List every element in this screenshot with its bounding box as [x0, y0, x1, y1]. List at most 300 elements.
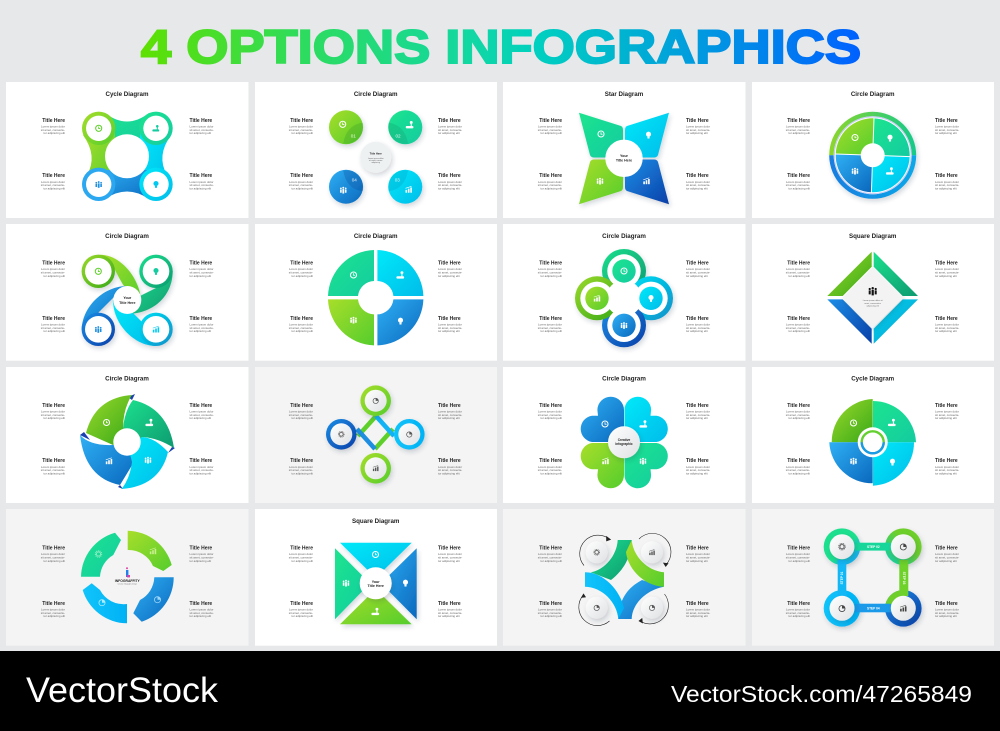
text block: bottom right: sit amet, consecte-: [935, 326, 959, 330]
bar: step 03: STEP 03: [902, 572, 906, 585]
center label: [119, 296, 135, 305]
text block: top left: [786, 403, 810, 420]
text block: top right: [686, 118, 710, 135]
center hole: [113, 428, 141, 456]
petal: bottom left: [581, 443, 624, 488]
text block: top right: [438, 118, 462, 135]
text block: top right: tur adipiscing elit: [190, 274, 211, 278]
text block: bottom left: [786, 458, 810, 475]
text block: top left: tur adipiscing elit: [788, 559, 810, 563]
text block: bottom left: Lorem ipsum dolor: [41, 607, 65, 611]
text block: bottom right: Lorem ipsum dolor: [438, 322, 462, 326]
text block: top right: Title Here: [438, 260, 461, 266]
text block: bottom right: tur adipiscing elit: [438, 329, 460, 333]
text block: bottom right: Lorem ipsum dolor: [686, 180, 710, 184]
text block: top left: Lorem ipsum dolor: [786, 552, 810, 556]
text block: bottom right: [438, 458, 462, 475]
heading: Circle Diagram: [851, 91, 895, 98]
text block: top right: Lorem ipsum dolor: [935, 125, 959, 129]
text block: bottom right: Lorem ipsum dolor: [438, 465, 462, 469]
text block: top left: Lorem ipsum dolor: [289, 409, 313, 413]
text block: top right: tur adipiscing elit: [935, 559, 957, 563]
band: green: [626, 540, 664, 587]
text block: bottom right: Lorem ipsum dolor: [935, 322, 959, 326]
center callout: sit amet, consec: [369, 159, 383, 162]
panel: circle diagram, row 2 column 2: [255, 224, 497, 361]
text block: top left: Title Here: [42, 546, 65, 552]
text block: top right: Title Here: [686, 118, 709, 124]
text block: bottom left: [41, 458, 65, 475]
text block: bottom left: Title Here: [539, 601, 562, 607]
text block: bottom left: [786, 173, 810, 190]
text block: bottom right: Title Here: [438, 316, 461, 322]
band: teal: [591, 540, 632, 580]
text block: bottom left: tur adipiscing elit: [788, 471, 810, 475]
text block: bottom left: sit amet, consecte-: [538, 183, 562, 187]
text block: bottom left: Title Here: [539, 173, 562, 179]
trapezoid: top right: [874, 252, 918, 296]
node circles: [586, 541, 663, 619]
text block: top left: [289, 118, 313, 135]
center label: Creative: [618, 438, 631, 442]
text block: top right: [935, 118, 959, 135]
text block: top left: tur adipiscing elit: [43, 416, 65, 420]
text block: bottom right: tur adipiscing elit: [935, 329, 957, 333]
text block: bottom left: Lorem ipsum dolor: [538, 465, 562, 469]
center text: Lorem ipsum dolor sit: [863, 299, 883, 302]
text block: bottom right: Lorem ipsum dolor: [686, 322, 710, 326]
text block: top left: sit amet, consecte-: [41, 413, 65, 417]
blade: bottom left: [579, 160, 623, 204]
text block: bottom right: Title Here: [190, 173, 212, 179]
center label: Your: [620, 154, 629, 158]
logo: Creative infographic design: [118, 583, 137, 586]
node: bottom right: [139, 168, 173, 201]
sector: bottom left: [834, 155, 872, 192]
text block: bottom left: Title Here: [539, 458, 562, 464]
text block: top left: sit amet, consecte-: [41, 270, 65, 274]
text block: top right: [438, 260, 462, 278]
text block: top left: Lorem ipsum dolor: [41, 125, 65, 129]
text block: bottom left: sit amet, consecte-: [41, 183, 65, 187]
text block: top right: Lorem ipsum dolor: [190, 267, 213, 271]
center label: Title Here: [616, 159, 632, 163]
text block: top left: tur adipiscing elit: [540, 131, 562, 135]
text block: top left: Lorem ipsum dolor: [41, 552, 65, 556]
center callout: Lorem ipsum dolor: [368, 157, 384, 160]
text block: top left: Title Here: [290, 118, 313, 124]
text block: bottom right: sit amet, consecte-: [438, 326, 462, 330]
text block: top right: Lorem ipsum dolor: [935, 409, 959, 413]
node faces: [830, 534, 916, 621]
text block: bottom right: [190, 316, 214, 333]
text block: top right: Lorem ipsum dolor: [438, 409, 462, 413]
text block: top right: sit amet, consecte-: [190, 555, 214, 559]
text block: top left: Lorem ipsum dolor: [41, 267, 65, 271]
blade: top right: [625, 113, 669, 158]
text block: bottom right: sit amet, consecte-: [438, 183, 462, 187]
text block: top left: [538, 403, 562, 420]
text block: top right: [438, 403, 462, 420]
text block: bottom right: [935, 601, 959, 618]
circle 01: 01: [351, 134, 356, 139]
text block: top left: [289, 260, 313, 278]
text block: bottom right: sit amet, consecte-: [190, 611, 214, 615]
text block: top left: sit amet, consecte-: [538, 270, 562, 274]
text block: bottom left: Title Here: [42, 458, 65, 464]
text block: top left: sit amet, consecte-: [289, 128, 313, 132]
text block: top right: Lorem ipsum dolor: [935, 552, 959, 556]
petal: bottom right: [624, 443, 668, 488]
text block: bottom left: Title Here: [787, 173, 810, 179]
text block: bottom left: Lorem ipsum dolor: [289, 180, 313, 184]
text block: bottom right: tur adipiscing elit: [686, 329, 708, 333]
text block: top left: sit amet, consecte-: [289, 555, 313, 559]
text block: top right: sit amet, consecte-: [686, 413, 710, 417]
text block: bottom right: Lorem ipsum dolor: [190, 465, 213, 469]
text block: top left: Lorem ipsum dolor: [538, 409, 562, 413]
text block: top left: tur adipiscing elit: [540, 274, 562, 278]
text block: bottom right: tur adipiscing elit: [438, 614, 460, 618]
text block: bottom right: tur adipiscing elit: [686, 614, 708, 618]
text block: bottom right: Lorem ipsum dolor: [935, 607, 959, 611]
text block: bottom left: Lorem ipsum dolor: [786, 607, 810, 611]
text block: bottom right: tur adipiscing elit: [438, 471, 460, 475]
center ball: [608, 426, 640, 458]
text block: top left: sit amet, consecte-: [538, 128, 562, 132]
panel: circle diagram, row 1 column 2: [255, 82, 497, 218]
node: top left: [82, 255, 115, 288]
bar: step 04: STEP 04: [867, 606, 880, 610]
text block: bottom right: Title Here: [935, 173, 958, 179]
node: top left: [824, 528, 860, 565]
sector: bottom right: [873, 442, 914, 486]
text block: bottom left: tur adipiscing elit: [43, 614, 65, 618]
ring pie diagram: [829, 112, 916, 199]
heading: Cycle Diagram: [851, 375, 895, 382]
text block: top left: tur adipiscing elit: [788, 274, 810, 278]
text block: top right: [190, 403, 214, 420]
text block: bottom right: tur adipiscing elit: [438, 186, 460, 190]
text block: top right: Title Here: [686, 260, 709, 266]
text block: bottom right: sit amet, consecte-: [438, 468, 462, 472]
text block: top left: [289, 403, 313, 420]
text block: bottom right: Title Here: [686, 316, 709, 322]
text block: top left: sit amet, consecte-: [41, 128, 65, 132]
text block: top right: [686, 546, 710, 563]
band: cyan: [585, 572, 624, 619]
text block: bottom right: Title Here: [686, 458, 709, 464]
text block: top right: sit amet, consecte-: [190, 413, 214, 417]
text block: top left: [41, 546, 65, 563]
sector: bottom right: [872, 156, 910, 194]
text block: top left: [786, 546, 810, 563]
text block: bottom left: sit amet, consecte-: [289, 611, 313, 615]
text block: bottom left: Lorem ipsum dolor: [41, 322, 65, 326]
text block: bottom left: sit amet, consecte-: [538, 468, 562, 472]
text block: bottom right: [686, 173, 710, 190]
text block: top left: Lorem ipsum dolor: [786, 267, 810, 271]
flower diagram: [581, 397, 668, 488]
text block: top right: Lorem ipsum dolor: [438, 552, 462, 556]
text block: bottom left: Title Here: [787, 316, 810, 322]
text block: bottom left: sit amet, consecte-: [538, 611, 562, 615]
segment: green: [128, 531, 172, 571]
text block: top right: tur adipiscing elit: [438, 274, 460, 278]
text block: bottom left: Lorem ipsum dolor: [289, 465, 313, 469]
icons: [594, 550, 655, 611]
text block: top left: sit amet, consecte-: [786, 413, 810, 417]
quadrant: top left: [328, 250, 374, 296]
text block: top right: [686, 403, 710, 420]
node: top left: [82, 112, 115, 145]
text block: bottom left: tur adipiscing elit: [43, 471, 65, 475]
text block: top right: sit amet, consecte-: [686, 270, 710, 274]
text block: bottom right: tur adipiscing elit: [935, 471, 957, 475]
text block: top left: tur adipiscing elit: [291, 416, 313, 420]
text block: top right: Title Here: [438, 118, 461, 124]
segment: cyan: [83, 583, 127, 623]
text block: bottom left: tur adipiscing elit: [540, 329, 562, 333]
text block: top left: sit amet, consecte-: [786, 555, 810, 559]
text block: bottom left: tur adipiscing elit: [291, 471, 313, 475]
text block: top left: Lorem ipsum dolor: [289, 552, 313, 556]
text block: top right: tur adipiscing elit: [935, 274, 957, 278]
text block: top right: Lorem ipsum dolor: [686, 125, 710, 129]
text block: top right: tur adipiscing elit: [686, 559, 708, 563]
text block: bottom left: sit amet, consecte-: [41, 611, 65, 615]
node: bottom right: [139, 313, 173, 346]
bar: step 01: STEP 01: [840, 571, 844, 584]
circle 04: 04: [352, 178, 357, 183]
text block: bottom left: [41, 601, 65, 618]
text block: bottom left: [538, 173, 562, 190]
text block: bottom left: sit amet, consecte-: [41, 468, 65, 472]
quadrant: bottom right: [377, 299, 423, 345]
sector: top right: [873, 118, 911, 156]
text block: top left: [538, 118, 562, 135]
arrows: [579, 533, 671, 626]
text block: bottom left: tur adipiscing elit: [43, 329, 65, 333]
circle 01: [329, 110, 363, 144]
text block: bottom right: sit amet, consecte-: [935, 468, 959, 472]
sector: top left: [832, 399, 873, 442]
node: bottom left: [82, 313, 115, 346]
text block: top right: Title Here: [686, 403, 709, 409]
text block: bottom right: Title Here: [935, 601, 958, 607]
text block: bottom right: Title Here: [686, 173, 709, 179]
text block: top left: Title Here: [787, 260, 810, 266]
text block: bottom right: [686, 601, 710, 618]
text block: bottom right: sit amet, consecte-: [190, 326, 214, 330]
text block: bottom right: tur adipiscing elit: [686, 471, 708, 475]
leaf swirl diagram: [80, 394, 175, 489]
steps square: [824, 528, 922, 627]
text block: bottom right: sit amet, consecte-: [935, 611, 959, 615]
text block: bottom right: tur adipiscing elit: [190, 186, 211, 190]
text block: top right: Title Here: [935, 260, 958, 266]
text block: top right: sit amet, consecte-: [935, 555, 959, 559]
text block: top left: Title Here: [787, 118, 810, 124]
diamond diagram: [827, 252, 918, 344]
logo: [115, 567, 141, 586]
panel: broken ring diagram, row 4 column 1: [6, 509, 248, 646]
center label: [615, 438, 633, 446]
text block: top left: [41, 403, 65, 420]
text block: top right: sit amet, consecte-: [438, 270, 462, 274]
curved band diagram: [579, 533, 671, 626]
text block: bottom left: tur adipiscing elit: [788, 186, 810, 190]
text block: bottom right: tur adipiscing elit: [190, 329, 211, 333]
text block: top left: sit amet, consecte-: [786, 270, 810, 274]
text block: top left: [41, 260, 65, 278]
center circle: [605, 140, 643, 177]
text block: top right: tur adipiscing elit: [686, 274, 708, 278]
text block: bottom left: sit amet, consecte-: [786, 183, 810, 187]
text block: bottom left: [289, 316, 313, 333]
text block: bottom right: sit amet, consecte-: [190, 468, 214, 472]
panel: flower circle diagram, row 3 column 3: [503, 367, 746, 503]
text block: top right: Lorem ipsum dolor: [190, 409, 213, 413]
text block: bottom left: Lorem ipsum dolor: [538, 607, 562, 611]
text block: top left: Lorem ipsum dolor: [289, 125, 313, 129]
text block: top left: Title Here: [42, 403, 65, 409]
text block: bottom right: [190, 173, 214, 190]
text block: top left: Title Here: [42, 260, 65, 266]
text block: bottom left: tur adipiscing elit: [291, 614, 313, 618]
center label: [616, 154, 632, 163]
text block: top left: [289, 546, 313, 563]
text block: top right: sit amet, consecte-: [438, 555, 462, 559]
text block: top left: tur adipiscing elit: [291, 131, 313, 135]
text block: bottom left: Title Here: [290, 173, 313, 179]
text block: bottom right: sit amet, consecte-: [935, 183, 959, 187]
text block: top right: tur adipiscing elit: [438, 416, 460, 420]
text block: top right: tur adipiscing elit: [190, 416, 211, 420]
center ring: [858, 427, 888, 457]
panel: cycle diagram, row 3 column 4: [752, 367, 994, 503]
text block: bottom left: sit amet, consecte-: [538, 326, 562, 330]
node: right: [634, 282, 668, 315]
text block: top right: [935, 403, 959, 420]
text block: bottom left: Lorem ipsum dolor: [41, 465, 65, 469]
trapezoid: bottom left: [827, 299, 872, 344]
text block: bottom right: [438, 601, 462, 618]
node: top: [360, 385, 391, 416]
text block: top right: sit amet, consecte-: [190, 270, 214, 274]
text block: bottom right: Title Here: [438, 458, 461, 464]
text block: bottom left: tur adipiscing elit: [291, 329, 313, 333]
sector: bottom left: [829, 442, 873, 483]
text block: top left: Lorem ipsum dolor: [538, 552, 562, 556]
text block: top left: sit amet, consecte-: [289, 270, 313, 274]
node: left: [326, 419, 357, 450]
circle 02: 02: [395, 134, 401, 139]
text block: bottom right: Title Here: [190, 458, 212, 464]
text block: bottom right: Title Here: [935, 316, 958, 322]
text block: bottom left: [538, 458, 562, 475]
text block: bottom right: tur adipiscing elit: [190, 614, 211, 618]
band: blue: [618, 580, 664, 619]
text block: bottom left: tur adipiscing elit: [540, 614, 562, 618]
icon: people: [869, 287, 877, 295]
panel: knot diagram, row 3 column 2: [255, 367, 497, 503]
text block: top right: Title Here: [935, 403, 958, 409]
center text: [863, 299, 883, 308]
text block: bottom right: Title Here: [935, 458, 958, 464]
footer image id: VectorStock.com/47265849: [671, 681, 972, 707]
panel: cycle diagram, row 1 column 1: [6, 82, 248, 218]
text block: top left: Lorem ipsum dolor: [41, 409, 65, 413]
circle 04: [329, 170, 363, 204]
text block: top right: tur adipiscing elit: [935, 416, 957, 420]
text block: top right: Lorem ipsum dolor: [686, 552, 710, 556]
text block: top left: tur adipiscing elit: [291, 559, 313, 563]
text block: top right: Lorem ipsum dolor: [438, 125, 462, 129]
text block: top left: Title Here: [290, 546, 313, 552]
text block: bottom left: Lorem ipsum dolor: [538, 322, 562, 326]
text block: bottom left: tur adipiscing elit: [540, 471, 562, 475]
circle 03: [388, 170, 422, 204]
text block: top right: Lorem ipsum dolor: [935, 267, 959, 271]
text block: top right: tur adipiscing elit: [190, 559, 211, 563]
segment: teal: [81, 533, 121, 577]
text block: bottom right: Lorem ipsum dolor: [686, 465, 710, 469]
text block: bottom left: [538, 316, 562, 333]
text block: bottom right: tur adipiscing elit: [935, 186, 957, 190]
text block: bottom right: tur adipiscing elit: [935, 614, 957, 618]
text block: bottom left: Lorem ipsum dolor: [786, 180, 810, 184]
text block: top right: [438, 546, 462, 563]
text block: bottom left: Title Here: [42, 173, 65, 179]
panel: circle diagram, row 2 column 3: [503, 224, 746, 361]
center diamond: [842, 267, 903, 328]
text block: top right: [190, 118, 214, 135]
text block: top right: sit amet, consecte-: [935, 270, 959, 274]
text block: bottom left: sit amet, consecte-: [41, 326, 65, 330]
text block: top left: Lorem ipsum dolor: [538, 267, 562, 271]
text block: top left: sit amet, consecte-: [41, 555, 65, 559]
footer bar: [0, 651, 1000, 731]
center callout: Title Here: [370, 152, 382, 156]
text block: bottom right: sit amet, consecte-: [686, 611, 710, 615]
broken ring: [81, 531, 174, 623]
icons: [597, 131, 651, 185]
node: top right: [139, 112, 173, 145]
text block: top right: Lorem ipsum dolor: [438, 267, 462, 271]
trapezoid: bottom right: [874, 299, 918, 344]
text block: bottom right: Title Here: [686, 601, 709, 607]
text block: top right: Lorem ipsum dolor: [686, 267, 710, 271]
node: top: [607, 254, 641, 288]
heading: Circle Diagram: [354, 91, 398, 98]
text block: bottom left: Lorem ipsum dolor: [538, 180, 562, 184]
heading: Star Diagram: [605, 91, 644, 98]
center label: Your: [123, 296, 132, 300]
text block: top left: Title Here: [290, 403, 313, 409]
node: left: [580, 282, 614, 315]
text block: top left: tur adipiscing elit: [43, 274, 65, 278]
center label: [368, 580, 384, 588]
icons: [95, 548, 161, 606]
text block: top left: [786, 260, 810, 278]
text block: top left: [41, 118, 65, 135]
triangle: top: [340, 543, 412, 578]
heading: Circle Diagram: [105, 375, 149, 382]
quadrant: top right: [377, 250, 423, 296]
text block: bottom left: tur adipiscing elit: [788, 329, 810, 333]
center callout: adipiscing: [371, 162, 380, 164]
